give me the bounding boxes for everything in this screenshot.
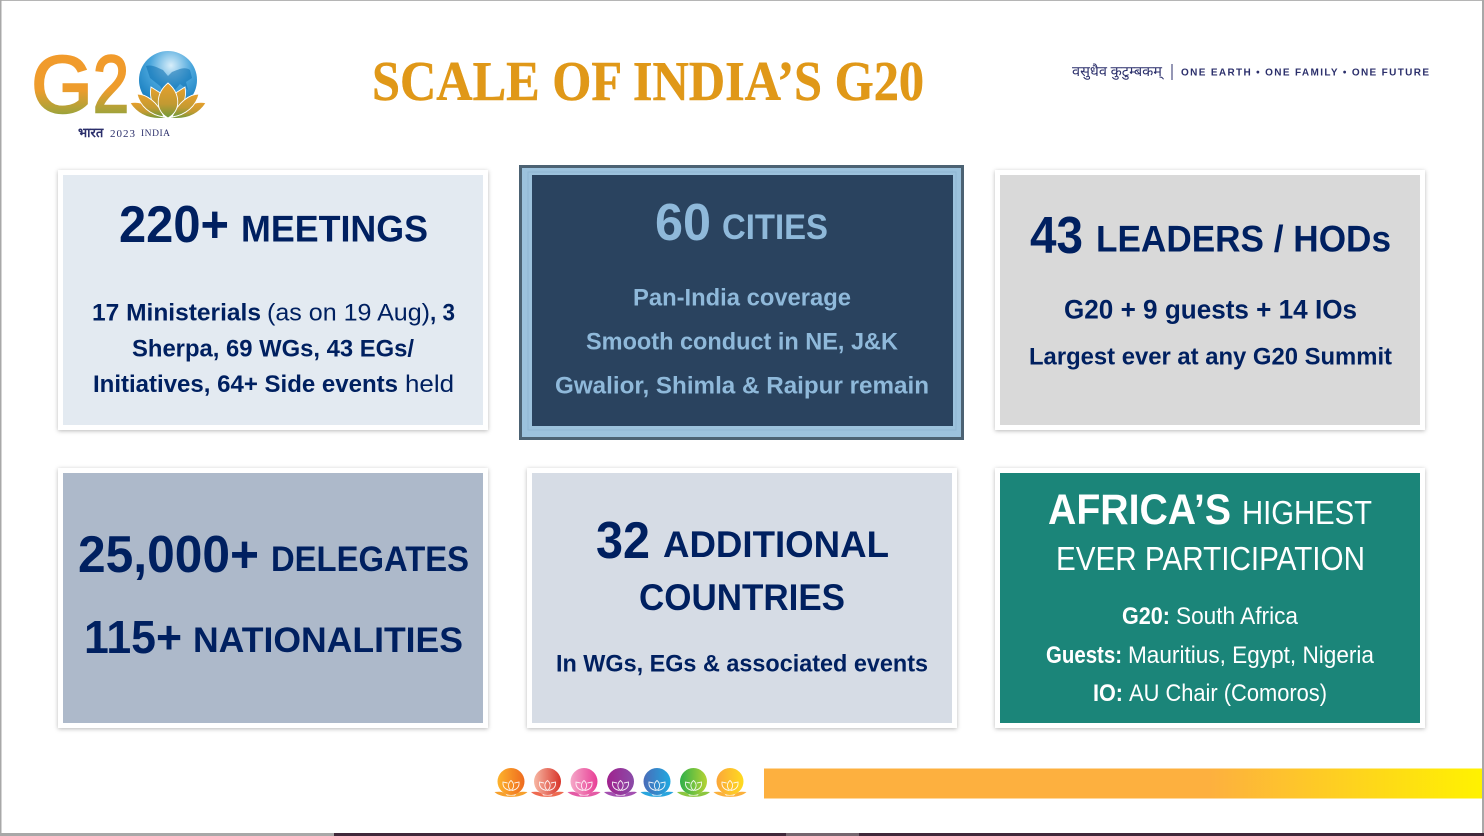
- text: African participants: G20:: [1122, 603, 1170, 630]
- heading: 43 leaders / HODs: [1030, 207, 1391, 265]
- text: leaders detail: G20 + 9 guests + 14 IOs: [1064, 294, 1357, 324]
- text: meetings breakdown: Initiatives, 64+ Side events: [93, 371, 398, 398]
- text: cities detail: Gwalior, Shimla & Raipur remain: [555, 372, 929, 400]
- text: African participants: South Africa: [1176, 603, 1299, 630]
- text: African participants: Mauritius, Egypt, Nigeria: [1128, 642, 1375, 669]
- panel: 220+ meetings: [58, 170, 488, 430]
- logo caption: भारत: [78, 125, 104, 140]
- text: cities detail: [555, 284, 929, 400]
- panel: 43 leaders: [995, 170, 1425, 430]
- heading: 220+ meetings: [119, 196, 428, 254]
- heading: 32 additional countries: COUNTRIES: [639, 577, 845, 618]
- heading: Africa's highest ever participation: HIGHEST: [1242, 494, 1372, 531]
- heading: 32 additional countries: [596, 512, 889, 618]
- tagline: वसुधैव कुटुम्बकम्: [1072, 63, 1164, 80]
- text: leaders detail: Largest ever at any G20 Summit: [1029, 344, 1392, 370]
- heading: 43 leaders / HODs: LEADERS / HODs: [1096, 218, 1391, 260]
- text: meetings breakdown: Sherpa, 69 WGs, 43 EGs/: [132, 336, 414, 362]
- text: meetings breakdown: 17 Ministerials: [92, 300, 261, 326]
- logo: G20 India 2023: [32, 40, 206, 140]
- text: meetings breakdown: [92, 300, 455, 398]
- icon: globe: [139, 51, 197, 109]
- stat: 115+ nationalities: [84, 611, 463, 663]
- icon: lotus: [130, 83, 206, 118]
- text: leaders detail: [1029, 294, 1392, 370]
- heading: 220+ meetings: MEETINGS: [241, 208, 428, 250]
- logo wordmark G2: [32, 40, 129, 130]
- logo caption: 2023: [110, 128, 136, 140]
- heading: 60 cities: [655, 194, 828, 252]
- text: countries detail: In WGs, EGs & associated events: [556, 650, 928, 678]
- heading: 32 additional countries: ADDITIONAL: [663, 524, 889, 565]
- footer gradient bar: [764, 768, 1482, 798]
- heading: 220+ meetings: 220+: [119, 196, 229, 254]
- tagline: ONE EARTH • ONE FAMILY • ONE FUTURE: [1181, 68, 1429, 78]
- text: meetings breakdown: (as on 19 Aug): [267, 300, 430, 326]
- stat: 25,000+ delegates: [78, 526, 469, 584]
- text: cities detail: Smooth conduct in NE, J&K: [586, 328, 899, 356]
- icons: row of coloured lotus globes: [494, 768, 746, 797]
- stat: 115+ nationalities: NATIONALITIES: [193, 621, 463, 660]
- heading: 60 cities: CITIES: [722, 208, 828, 247]
- logo wordmark G2: G: [32, 40, 92, 130]
- stat: 115+ nationalities: 115+: [84, 611, 182, 663]
- title: SCALE OF INDIA’S G20: [372, 51, 924, 113]
- heading: Africa's highest ever participation: AFRICA’S: [1048, 486, 1231, 534]
- text: meetings breakdown: held: [405, 371, 454, 398]
- panel: delegates and nationalities: [58, 468, 488, 728]
- text: African participants: AU Chair (Comoros): [1129, 680, 1327, 707]
- heading: 43 leaders / HODs: 43: [1030, 207, 1083, 265]
- stat: 25,000+ delegates: 25,000+: [78, 526, 259, 584]
- stat: 25,000+ delegates: DELEGATES: [271, 540, 469, 579]
- panel: 32 additional countries: [527, 468, 957, 728]
- tagline: [1072, 63, 1429, 80]
- panel: 60 cities: [520, 166, 962, 438]
- heading: 60 cities: 60: [655, 194, 711, 252]
- panel: Africa's participation: [995, 468, 1425, 728]
- text: cities detail: Pan-India coverage: [633, 284, 851, 312]
- heading: Africa's highest ever participation: EVER PARTICIPATION: [1056, 540, 1365, 577]
- text: meetings breakdown: , 3: [430, 300, 455, 326]
- text: African participants: IO:: [1093, 680, 1123, 707]
- logo wordmark G2: 2: [93, 40, 129, 130]
- text: African participants: [1046, 603, 1375, 707]
- heading: Africa's highest ever participation: [1048, 486, 1372, 577]
- logo caption: [78, 125, 170, 140]
- text: African participants: Guests:: [1046, 642, 1122, 669]
- logo caption: INDIA: [141, 129, 170, 139]
- heading: 32 additional countries: 32: [596, 512, 650, 570]
